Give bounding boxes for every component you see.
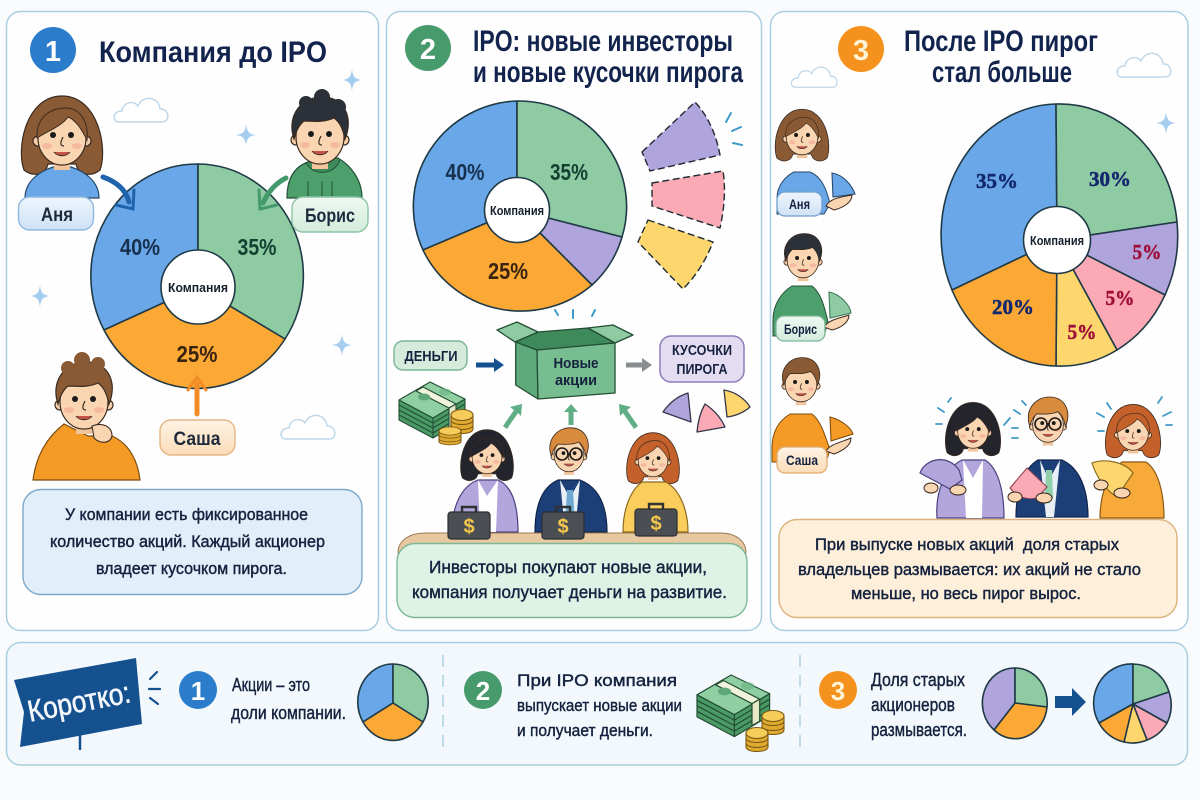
pie chart: after IPO: Компания (1030, 233, 1084, 248)
investor: man in navy suit (535, 428, 607, 532)
investor: woman in yellow (623, 433, 688, 532)
callout: panel 2 text: компания получает деньги на развитие. (412, 582, 727, 602)
callout: panel 3 text: владельцев размывается: их акций не стало (798, 561, 1141, 579)
pie chart: during IPO: 35% (550, 159, 588, 185)
callout: panel 3 text (779, 520, 1177, 618)
label: Boris small (776, 316, 825, 341)
pie chart: during IPO (413, 101, 627, 311)
label: pie pieces: КУСОЧКИ (672, 342, 732, 359)
callout: panel 2 text (397, 544, 747, 618)
summary 2: выпускает новые акции (517, 696, 682, 715)
summary 2: При IPO компания (517, 671, 677, 690)
pie chart: during IPO: 40% (446, 159, 484, 185)
icon: box of new shares (497, 322, 633, 399)
step badge 3: 3 (853, 35, 869, 67)
icon: three pie pieces (663, 390, 750, 432)
panel: after IPO (770, 12, 1188, 630)
label: Boris: Борис (305, 206, 355, 227)
new pie pieces, dashed (638, 102, 724, 289)
arrow: box to pieces (626, 358, 652, 372)
callout: panel 3 text: меньше, но весь пирог вырос. (851, 585, 1081, 603)
investor: woman in purple (452, 430, 518, 532)
icon: briefcases (448, 504, 677, 539)
person: Boris (287, 89, 362, 198)
arrow: Sasha to orange slice (188, 377, 206, 414)
label: Sasha (160, 420, 235, 455)
panel: IPO (386, 12, 762, 630)
callout: panel 1 text: владеет кусочком пирога. (96, 560, 287, 578)
icon: box of new shares: акции (555, 372, 597, 389)
person: Sasha (33, 352, 140, 480)
arrow: Boris to green slice (259, 178, 286, 209)
person: Sasha with slice (772, 358, 853, 462)
pie chart: during IPO: Компания (490, 204, 544, 218)
summary 1: доли компании. (231, 703, 346, 723)
summary 3: 3 (831, 676, 845, 706)
pie chart: before IPO: 25% (176, 341, 218, 367)
label: Sasha small: Саша (786, 452, 818, 468)
mini pie: after dilution (1094, 664, 1171, 743)
pie chart: before IPO: Компания (168, 280, 228, 295)
step badge 3 (838, 26, 884, 72)
banner: Коротко (14, 658, 142, 750)
pie chart: after IPO: 35% (976, 169, 1018, 193)
arrow: Anya to blue slice (103, 177, 134, 209)
accent ticks (149, 672, 160, 704)
label: Anya small (777, 192, 822, 216)
step badge 2: 2 (420, 34, 436, 66)
decorative clouds and sparkle (791, 53, 1176, 134)
label: pie pieces: ПИРОГА (676, 361, 728, 378)
person: Anya with slice (775, 109, 855, 214)
summary 3: Доля старых (871, 670, 965, 690)
icon: banknotes and coins (399, 382, 473, 445)
banner: Коротко: Коротко: (25, 676, 133, 729)
pie chart: after IPO: 5% (1132, 240, 1162, 264)
icon: banknotes and coins (697, 675, 784, 752)
arrows: investors to box (503, 404, 638, 429)
label: pie pieces (660, 336, 744, 382)
investor: man holding pink slice (1008, 397, 1088, 517)
summary 2: 2 (476, 676, 490, 706)
heading 2: IPO: новые инвесторы (473, 25, 733, 58)
pie chart: during IPO: 25% (488, 258, 528, 284)
panel: summary (6, 642, 1188, 765)
pie chart: after IPO: 5% (1106, 286, 1134, 310)
arrow: dilution (1055, 688, 1086, 716)
summary 1 (179, 664, 428, 740)
callout: panel 3 text: При выпуске новых акций доля старых (815, 536, 1120, 554)
pie chart: after IPO: 20% (992, 295, 1034, 319)
step badge 1: 1 (45, 36, 61, 68)
callout: panel 1 text: количество акций. Каждый акционер (50, 533, 325, 551)
summary 2: и получает деньги. (517, 721, 653, 740)
excitement ticks (936, 397, 1172, 438)
label: Sasha small (777, 447, 827, 473)
table (398, 533, 746, 553)
step badge 2 (405, 25, 451, 71)
label: Anya (18, 197, 94, 230)
panel: company before IPO (6, 12, 378, 630)
summary 1: 1 (191, 676, 205, 706)
investor: woman holding purple slice (920, 402, 1004, 518)
pie chart: after IPO: 30% (1089, 167, 1131, 191)
person: Anya (21, 96, 103, 198)
heading 2: и новые кусочки пирога (473, 56, 743, 89)
label: Boris small: Борис (784, 321, 817, 337)
summary 3: размывается. (871, 720, 967, 740)
sparkle ticks (555, 113, 742, 318)
callout: panel 1 text (23, 490, 362, 594)
summary 2 (443, 655, 784, 755)
summary 3: акционеров (871, 695, 955, 715)
callout: panel 2 text: Инвесторы покупают новые акции, (429, 557, 707, 577)
step badge 1 (30, 27, 76, 73)
pie chart: after IPO (941, 104, 1178, 366)
callout: panel 1 text: У компании есть фиксированное (65, 506, 308, 524)
heading 3: стал больше (932, 56, 1072, 89)
heading 3 (904, 25, 1098, 89)
label: Sasha: Саша (174, 429, 221, 450)
icon: box of new shares: Новые (554, 355, 598, 372)
heading 1: Компания до IPO (99, 36, 327, 69)
label: Boris (292, 197, 368, 232)
arrow: money to box (476, 358, 504, 372)
mini pie: old holders (982, 668, 1047, 739)
person: Boris with slice (773, 234, 851, 336)
pie chart: before IPO: 40% (120, 234, 160, 260)
investor: woman holding yellow slice (1092, 404, 1164, 518)
summary 1: Акции – это (232, 675, 310, 695)
label: Anya: Аня (41, 205, 73, 226)
label: Anya small: Аня (789, 196, 810, 212)
pie chart: before IPO (91, 164, 303, 388)
heading 2 (473, 25, 743, 89)
mini pie: three shares (358, 664, 428, 740)
heading 3: После IPO пирог (904, 25, 1098, 58)
label: money: ДЕНЬГИ (404, 348, 458, 365)
pie chart: before IPO: 35% (238, 234, 276, 260)
summary 3 (800, 655, 1171, 755)
decorative clouds and sparkles (30, 69, 362, 439)
label: money (394, 341, 467, 370)
pie chart: after IPO: 5% (1068, 320, 1096, 344)
